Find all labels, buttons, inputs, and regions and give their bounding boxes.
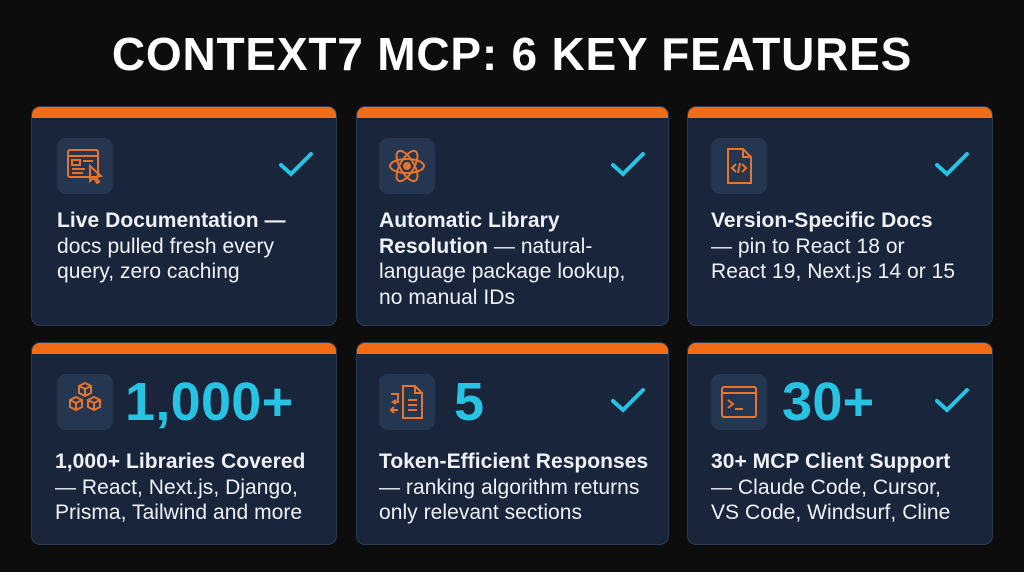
text [711, 209, 955, 283]
text [379, 209, 625, 308]
text: Live Documentation — [57, 209, 286, 232]
text: — Claude Code, Cursor, [711, 476, 941, 498]
text: Token-Efficient Responses [379, 450, 648, 473]
icon: check [934, 388, 970, 413]
text: 30+ MCP Client Support [711, 450, 950, 473]
icon: browser [57, 138, 113, 194]
text: React 19, Next.js 14 or 15 [711, 260, 955, 283]
icon: code file [711, 138, 767, 194]
text: — ranking algorithm returns [379, 476, 639, 498]
icon: atom [379, 138, 435, 194]
text: Resolution — natural- [379, 234, 592, 258]
icon: check [610, 152, 646, 177]
text: VS Code, Windsurf, Cline [711, 501, 950, 524]
text: no manual IDs [379, 286, 515, 308]
stat: 1,000+: 1,000+ [125, 372, 293, 432]
icon: check [278, 152, 314, 177]
text: only relevant sections [379, 501, 582, 524]
icon: cubes [57, 374, 113, 430]
panel: libraries covered [31, 342, 337, 545]
text: Automatic Library [379, 209, 560, 232]
panel: token-efficient responses [356, 342, 669, 545]
panel: MCP client support [687, 342, 993, 545]
stat: 5: 5 [454, 372, 484, 432]
panel: version-specific docs [687, 106, 993, 326]
icon: document [379, 374, 435, 430]
text: 1,000+ Libraries Covered [55, 450, 305, 473]
icon: terminal [711, 374, 767, 430]
text [55, 450, 305, 524]
text [57, 209, 286, 283]
text [379, 450, 648, 524]
text: Version-Specific Docs [711, 209, 933, 232]
text: — pin to React 18 or [711, 234, 905, 258]
icon: check [934, 152, 970, 177]
title: CONTEXT7 MCP: 6 KEY FEATURES [112, 28, 912, 80]
stat: 30+: 30+ [782, 372, 874, 432]
text: query, zero caching [57, 260, 240, 283]
text [711, 450, 950, 524]
panel: live documentation [31, 106, 337, 326]
text: language package lookup, [379, 260, 625, 283]
text: Prisma, Tailwind and more [55, 501, 302, 524]
text: docs pulled fresh every [57, 234, 274, 258]
panel: automatic library resolution [356, 106, 669, 326]
icon: check [610, 388, 646, 413]
text: — React, Next.js, Django, [55, 476, 298, 498]
